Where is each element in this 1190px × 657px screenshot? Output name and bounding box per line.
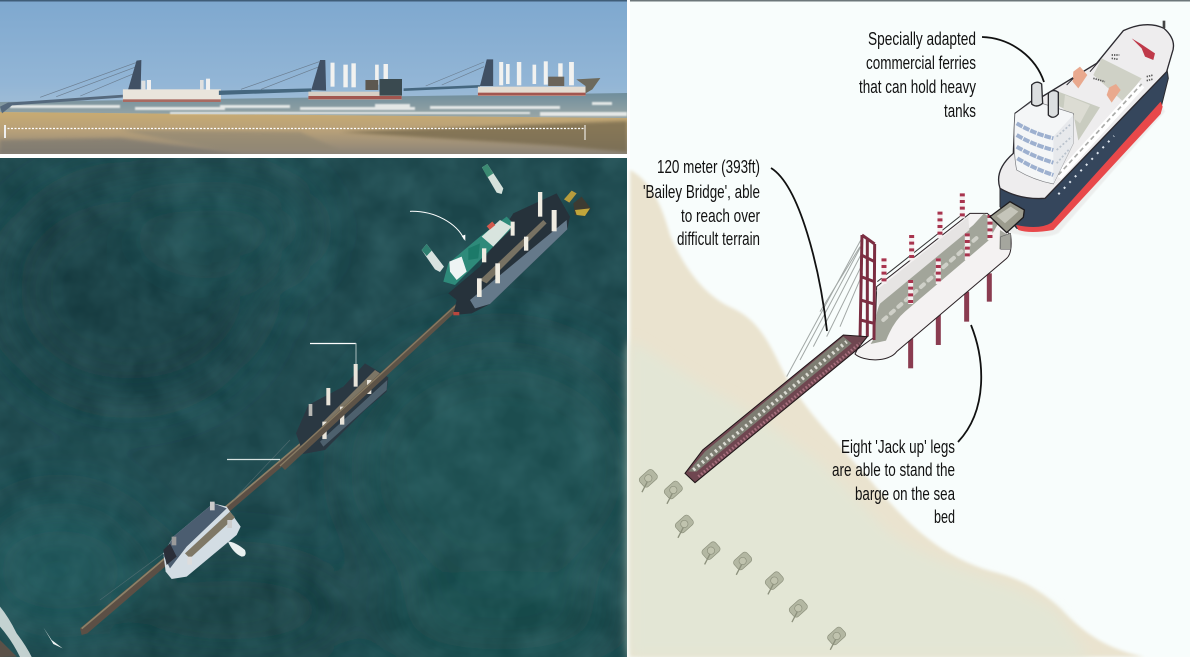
small support boats: [422, 164, 503, 272]
callout: Bailey bridge: difficult terrain: [677, 229, 760, 249]
beach: inner tone: [630, 340, 1090, 657]
barge near shore: [163, 502, 246, 579]
top barge with docked ferry: [280, 191, 591, 470]
barge three with crane and bridge: [404, 59, 600, 96]
annotation leader to stack: [310, 343, 356, 364]
main deck: [999, 25, 1174, 199]
callout: Bailey bridge: to reach over: [681, 206, 760, 226]
barge two with crane and bridge: [219, 60, 402, 100]
panel: beach photo of three barges: [0, 0, 627, 154]
annotation arrow to ferry: [410, 211, 465, 241]
callout: jack-up legs: barge on the sea: [855, 484, 956, 504]
funnels: [1032, 82, 1058, 117]
callout: jack-up legs: bed: [934, 507, 955, 527]
callout: ferries: that can hold heavy: [859, 77, 976, 97]
panel: illustrated cutaway of pier: [630, 0, 1190, 657]
callout: Bailey bridge: 120 meter (393ft): [657, 157, 760, 177]
tanks on the beach: [634, 468, 847, 650]
Bailey bridge truss: [685, 335, 867, 483]
callout: Bailey bridge: 'Bailey Bridge', able: [643, 182, 760, 202]
callout: ferries: tanks: [944, 101, 976, 121]
callout: jack-up legs: are able to stand the: [832, 460, 955, 480]
callout: ferries: Specially adapted: [868, 29, 976, 49]
docked ferry: [443, 217, 515, 285]
barge deck with trough: [855, 213, 1011, 360]
yellow work barge: [564, 191, 591, 216]
jack-up legs behind barge: [911, 273, 989, 368]
helicopter: [1132, 38, 1155, 60]
bridge tower: [860, 235, 875, 340]
orange lifeboats: [1073, 67, 1087, 88]
portholes: [1058, 136, 1114, 194]
scale line across the pier length: [4, 125, 585, 140]
shoreline surf: [0, 607, 63, 657]
callout: ferries: [859, 29, 1044, 121]
panel: satellite view of the pier: [0, 158, 650, 657]
bridge span across the water: [80, 440, 308, 635]
annotation leader to bridge: [227, 458, 280, 460]
ferry ship: [999, 21, 1174, 237]
jack-up leg towers: [884, 193, 990, 304]
callout: jack-up legs: Eight 'Jack up' legs: [841, 437, 955, 457]
barge one with crane and bridge: [0, 60, 221, 113]
red waterline: [1016, 102, 1163, 232]
superstructure: [1014, 101, 1073, 184]
callout: jack-up legs: [832, 325, 981, 527]
beach: sand edge: [630, 170, 1145, 657]
ship hull: [1000, 67, 1168, 230]
side railing: [1058, 85, 1142, 177]
deck wells: [1057, 92, 1100, 141]
callout: ferries: commercial ferries: [866, 53, 976, 73]
bow mast: [1163, 21, 1165, 28]
callout: Bailey bridge: [643, 157, 827, 331]
ramp between ferry and barge: [990, 202, 1024, 249]
middle barge: [296, 363, 388, 454]
Bailey bridge cables: [787, 238, 863, 377]
deck fittings: [1093, 55, 1153, 82]
